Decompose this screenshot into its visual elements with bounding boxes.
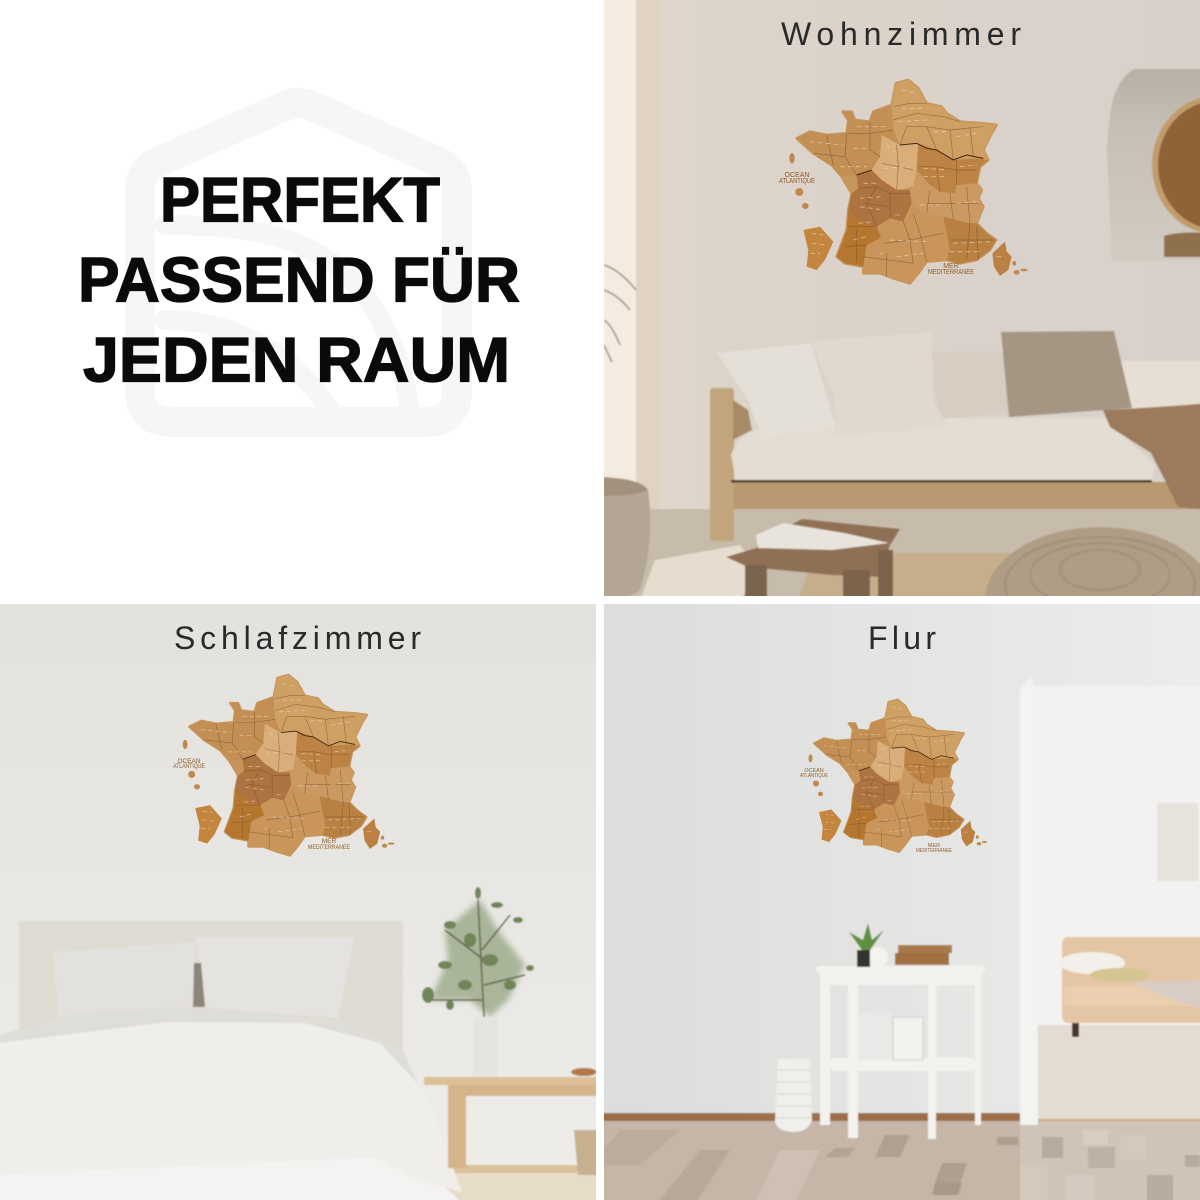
icon: watermark house: [140, 103, 457, 422]
sofa: [710, 331, 1200, 541]
map: Flur: MEDITERRANEE: [916, 848, 952, 854]
rail behind sofa: [1122, 361, 1200, 408]
map: Wohnzimmer: OCEAN: [785, 172, 809, 179]
plant: [604, 265, 636, 362]
wall niche with basket: [1107, 69, 1200, 261]
pillows: [53, 937, 354, 1018]
headboard: [19, 921, 403, 1051]
panel: Wohnzimmer photo: [604, 0, 1200, 596]
title: PASSEND FÜR: [78, 246, 520, 316]
panel: headline: [0, 0, 600, 600]
label: Schlafzimmer: Schlafzimmer: [174, 620, 421, 656]
floor: [627, 508, 1200, 596]
pouf: [985, 526, 1200, 596]
table objects: [849, 923, 952, 1060]
vase and plant: [421, 886, 535, 1018]
map: Wohnzimmer: MER: [943, 263, 959, 270]
map: Wohnzimmer: MEDITERRANEE: [928, 269, 974, 276]
panel: Schlafzimmer photo: [0, 594, 610, 1200]
door frame: [1019, 678, 1144, 1126]
blanket: [1103, 403, 1200, 510]
map: Flur: ATLANTIQUE: [800, 773, 828, 779]
vase: [775, 1059, 812, 1132]
map: Wohnzimmer: [779, 80, 1028, 283]
panel: Flur photo: [590, 594, 1200, 1200]
map: Schlafzimmer: [173, 675, 394, 855]
rug: [799, 552, 1010, 596]
table: [816, 966, 985, 1139]
floor: [590, 1120, 1200, 1200]
title: JEDEN RAUM: [83, 326, 510, 396]
map: Schlafzimmer: MER: [322, 838, 337, 845]
stool with book: [726, 518, 900, 596]
map: Schlafzimmer: OCEAN: [177, 758, 201, 765]
map: Schlafzimmer: MEDITERRANEE: [308, 844, 351, 851]
label: Flur: Flur: [868, 620, 936, 656]
map: Flur: [800, 700, 987, 854]
map: Flur: OCEAN: [804, 768, 824, 774]
floor: [453, 1164, 578, 1174]
next room through doorway: [1037, 695, 1200, 1120]
title: [78, 166, 520, 396]
map: Flur: MER: [928, 843, 940, 849]
pot: [604, 490, 650, 596]
map: Wohnzimmer: ATLANTIQUE: [779, 178, 815, 185]
bed: [0, 1007, 470, 1200]
sofa in next room: [1059, 937, 1200, 1037]
pillows: [929, 352, 1008, 419]
title: PERFEKT: [160, 166, 440, 236]
basket: [573, 1129, 596, 1176]
map: Schlafzimmer: ATLANTIQUE: [173, 763, 206, 770]
label: Wohnzimmer: Wohnzimmer: [781, 16, 1021, 52]
bench: [424, 1077, 608, 1168]
